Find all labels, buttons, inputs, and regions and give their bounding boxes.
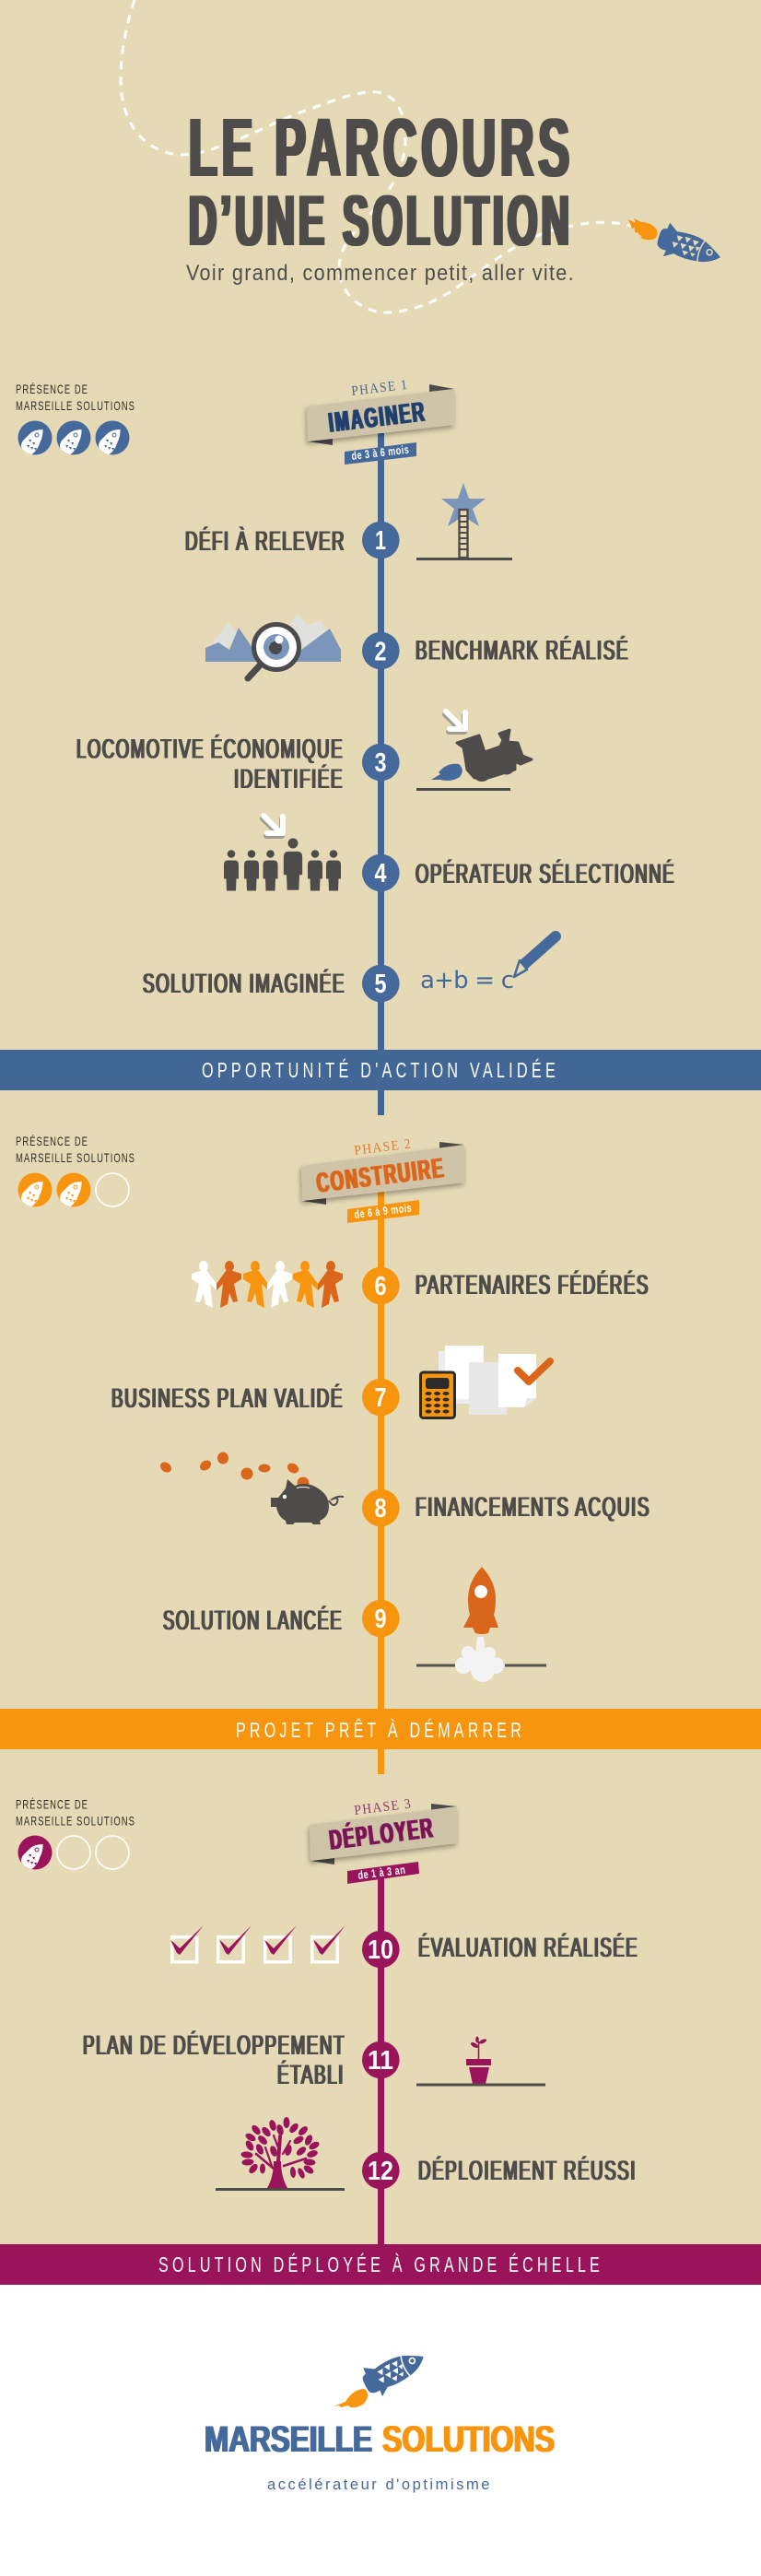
banner: opportunite — [0, 1050, 761, 1090]
step 11 — [83, 2030, 545, 2090]
banner: projet: PROJET PRÊT À DÉMARRER — [236, 1718, 525, 1742]
sign: phase 3 deployer: de 1 à 3 an — [357, 1864, 406, 1882]
icon: rocket launch — [416, 1567, 546, 1682]
step 11: ÉTABLI — [277, 2060, 345, 2090]
step 9 — [163, 1567, 546, 1682]
step 1 — [185, 483, 512, 560]
icon: star and ladder — [416, 483, 512, 560]
step 2 — [205, 614, 629, 678]
icon: locomotive — [416, 730, 532, 791]
step 4: 4 — [374, 859, 387, 888]
presence: phase 1: PRÉSENCE DE — [16, 382, 88, 396]
presence: phase 3: MARSEILLE SOLUTIONS — [16, 1814, 135, 1829]
sign: phase 2 construire: de 6 à 9 mois — [354, 1201, 413, 1221]
icon: formula and pencil: a+b = c — [420, 967, 514, 994]
logo: SOLUTIONS — [382, 2419, 555, 2460]
step 5: SOLUTION IMAGINÉE — [143, 969, 345, 999]
sign: phase 3 deployer: DÉPLOYER — [328, 1811, 436, 1856]
step 3: 3 — [374, 748, 387, 778]
presence: phase 2: MARSEILLE SOLUTIONS — [16, 1150, 135, 1165]
logo fish — [357, 2340, 430, 2401]
title — [189, 102, 574, 261]
icon: arrow — [263, 816, 283, 836]
tagline: accélérateur d'optimisme — [267, 2476, 492, 2493]
step 1: DÉFI À RELEVER — [185, 526, 345, 557]
presence: phase 3 — [16, 1797, 135, 1870]
footer background — [0, 2285, 761, 2576]
step 3: LOCOMOTIVE ÉCONOMIQUE — [76, 734, 344, 765]
sign: phase 2 construire: CONSTRUIRE — [315, 1151, 447, 1199]
step 11: 11 — [368, 2046, 393, 2076]
step 7 — [111, 1346, 550, 1417]
sign: phase 2 construire: PHASE 2 — [354, 1136, 413, 1159]
presence: phase 1 — [16, 382, 135, 455]
sign: phase 1 imaginer: IMAGINER — [327, 395, 427, 439]
icon: check boxes — [170, 1925, 345, 1962]
icon: paper chain people — [192, 1261, 343, 1308]
banner: opportunite: OPPORTUNITÉ D'ACTION VALIDÉE — [202, 1058, 559, 1082]
presence: phase 2 — [16, 1134, 135, 1207]
sign: phase 3 deployer — [310, 1796, 457, 1884]
icon: sprout pot — [416, 2037, 545, 2087]
step 5 — [143, 936, 556, 1002]
step 10 — [170, 1925, 638, 1968]
dashed flight path — [121, 0, 631, 312]
phase 1 spine — [378, 433, 384, 1115]
icon: fish rocket — [654, 221, 726, 272]
icon: calculator — [420, 1372, 455, 1417]
sign: phase 1 imaginer — [307, 378, 454, 465]
step 8 — [158, 1453, 650, 1526]
banner: solution deployee — [0, 2244, 761, 2285]
icon: formula and pencil — [420, 936, 556, 994]
logo — [205, 2340, 555, 2493]
step 10: 10 — [368, 1935, 393, 1965]
icon: papers and check — [439, 1346, 550, 1415]
subtitle: Voir grand, commencer petit, aller vite. — [186, 261, 575, 286]
icon: coins — [158, 1453, 310, 1489]
icon: piggy bank — [271, 1479, 344, 1524]
logo flame — [334, 2389, 368, 2407]
presence: phase 2: PRÉSENCE DE — [16, 1134, 88, 1148]
step 3 — [76, 712, 532, 794]
step 7: 7 — [374, 1383, 387, 1413]
step 11: PLAN DE DÉVELOPPEMENT — [83, 2030, 345, 2061]
step 9: SOLUTION LANCÉE — [163, 1606, 343, 1636]
header — [121, 0, 726, 312]
step 12 — [216, 2117, 637, 2191]
step 12: DÉPLOIEMENT RÉUSSI — [418, 2156, 637, 2186]
logo wordmark: MARSEILLE — [205, 2419, 372, 2460]
icon: magnifier and mountains — [205, 614, 341, 678]
step 5: 5 — [374, 970, 387, 999]
step 4 — [224, 816, 675, 891]
phase 2 spine — [378, 1189, 384, 1774]
sign: phase 2 construire — [301, 1136, 464, 1223]
step 8: 8 — [374, 1494, 387, 1523]
step 9: 9 — [374, 1605, 387, 1634]
icon: people — [224, 839, 341, 890]
step 1: 1 — [375, 526, 386, 556]
step 7: BUSINESS PLAN VALIDÉ — [111, 1383, 344, 1414]
banner: projet — [0, 1709, 761, 1749]
step 6: 6 — [374, 1272, 387, 1301]
presence: phase 1: MARSEILLE SOLUTIONS — [16, 398, 135, 413]
sign: phase 1 imaginer: de 3 à 6 mois — [351, 443, 410, 463]
icon: arrow — [445, 712, 465, 732]
presence: phase 3: PRÉSENCE DE — [16, 1797, 88, 1812]
flame — [628, 218, 657, 240]
icon: tree — [216, 2117, 345, 2191]
step 6 — [192, 1261, 650, 1308]
sign: phase 3 deployer: PHASE 3 — [354, 1796, 413, 1818]
step 2: BENCHMARK RÉALISÉ — [416, 636, 629, 665]
step 3: IDENTIFIÉE — [234, 764, 344, 794]
step 2: 2 — [374, 638, 387, 667]
step 12: 12 — [368, 2157, 393, 2186]
phase 3 spine — [378, 1871, 384, 2244]
sign: phase 1 imaginer: PHASE 1 — [351, 378, 409, 399]
